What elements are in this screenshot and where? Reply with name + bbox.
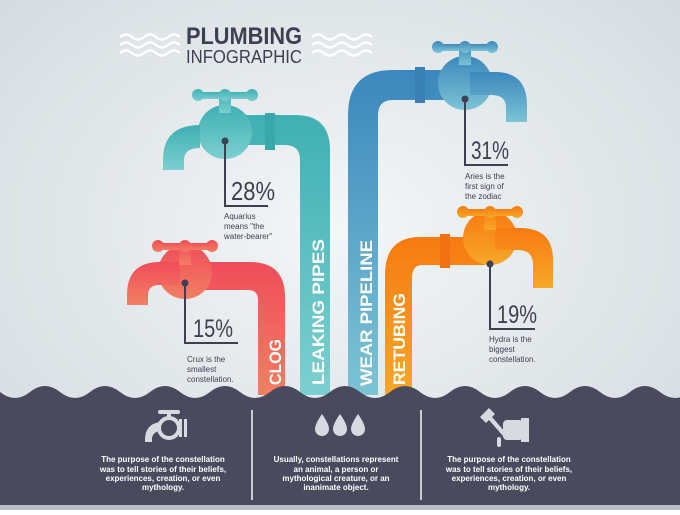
callout: 19%: Hydra is the xyxy=(489,335,532,344)
text: column 2: Usually, constellations represent xyxy=(274,455,399,464)
text: column 3: was to tell stories of their beliefs, xyxy=(445,465,572,474)
icon: water drops xyxy=(315,414,365,436)
title: PLUMBING xyxy=(186,23,302,50)
text: column 2 xyxy=(274,455,399,492)
callout: 15%: Crux is the xyxy=(187,355,226,364)
callout: 15%: smallest xyxy=(187,365,217,374)
text: column 2: mythological creature, or an xyxy=(282,474,390,483)
callout: 31%: Aries is the xyxy=(465,172,505,181)
callout: 28%: Aquarius xyxy=(224,212,256,221)
text: column 1: The purpose of the constellation xyxy=(101,455,225,464)
text: column 2: inanimate object. xyxy=(303,483,369,492)
text: column 2: an animal, a person or xyxy=(294,465,378,474)
callout: 28%: 28% xyxy=(231,176,275,206)
callout: 15% xyxy=(182,280,238,384)
callout: 28%: means "the xyxy=(224,222,265,231)
callout: 15%: 15% xyxy=(193,315,233,343)
callout: 15%: constellation. xyxy=(187,375,234,384)
text: column 3: mythology. xyxy=(488,483,530,492)
callout: 31%: 31% xyxy=(471,137,509,165)
text: column 1: mythology. xyxy=(142,483,184,492)
callout: 28%: water-bearer" xyxy=(223,232,272,241)
pipe label: clog: CLOG xyxy=(266,339,285,385)
icon: hand with wrench xyxy=(480,408,529,447)
text: column 1 xyxy=(99,455,226,492)
title: INFOGRAPHIC xyxy=(186,47,302,67)
text: column 3: The purpose of the constellation xyxy=(447,455,571,464)
pipe label: leaking pipes: LEAKING PIPES xyxy=(309,239,328,385)
bottom panel xyxy=(0,386,680,510)
text: column 3: experiences, creation, or even xyxy=(452,474,566,483)
title xyxy=(120,23,372,67)
pipe label: retubing: RETUBING xyxy=(390,293,409,385)
callout: 31% xyxy=(462,96,509,201)
faucet: red clog xyxy=(127,240,285,395)
callout: 31%: the zodiac xyxy=(465,192,501,201)
faucet: orange retubing xyxy=(385,206,553,395)
faucet: teal leaking pipes xyxy=(163,89,330,395)
callout: 31%: first sign of xyxy=(465,182,504,191)
pipe label: wear pipeline: WEAR PIPELINE xyxy=(357,240,376,386)
faucet: blue wear pipeline xyxy=(348,41,527,395)
callout: 19% xyxy=(486,260,537,364)
callout: 19%: 19% xyxy=(497,301,537,329)
icon: faucet xyxy=(145,410,187,442)
callout: 19%: constellation. xyxy=(489,355,536,364)
text: column 1: experiences, creation, or even xyxy=(106,474,220,483)
text: column 3 xyxy=(445,455,572,492)
text: column 1: was to tell stories of their beliefs, xyxy=(99,465,226,474)
callout: 19%: biggest xyxy=(489,345,516,354)
callout: 28% xyxy=(222,138,275,241)
